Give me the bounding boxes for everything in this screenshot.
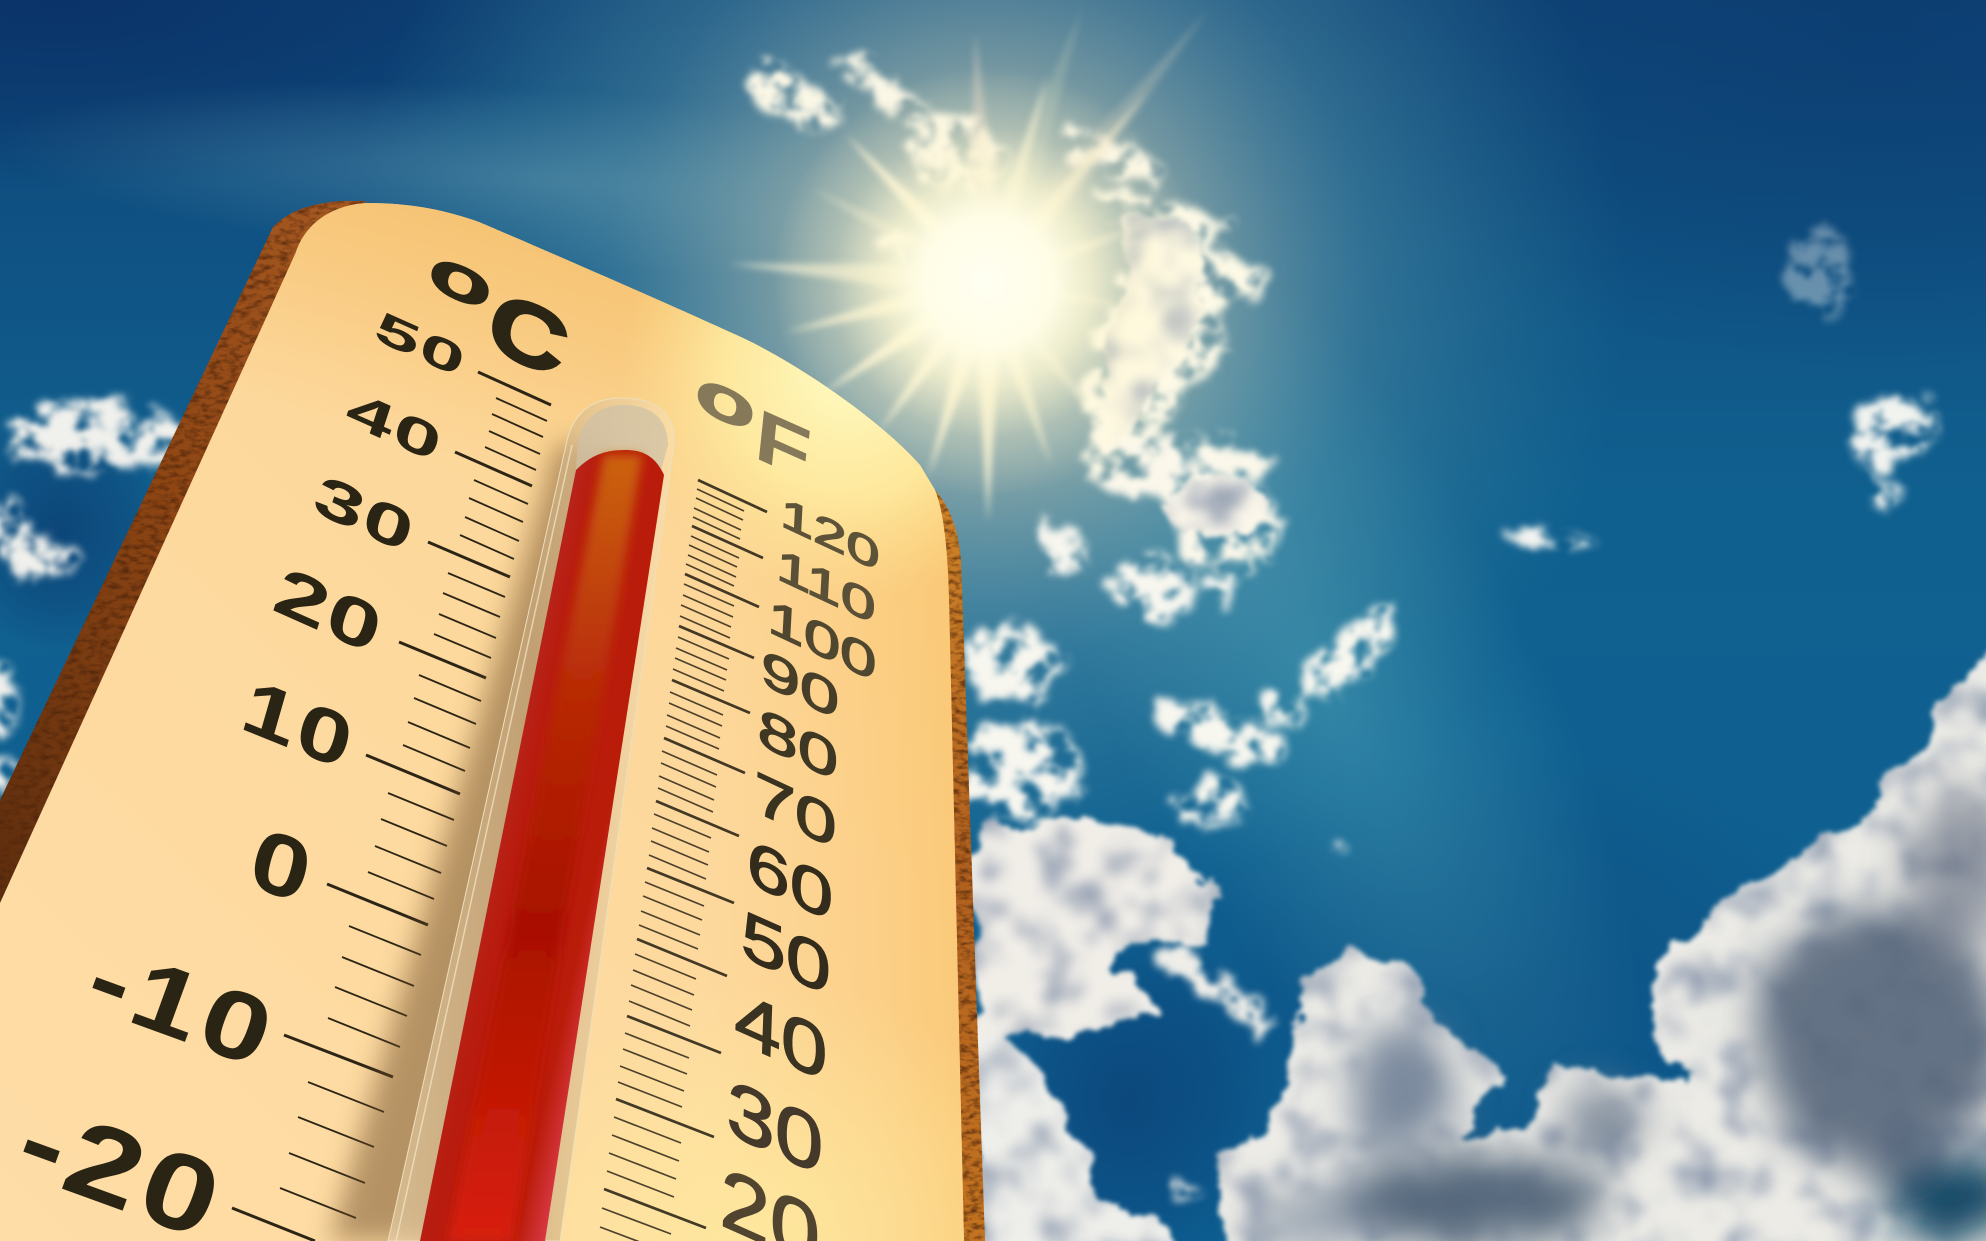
Celsius scale numbers: -10 [74,924,291,1089]
Fahrenheit unit label: o [690,354,762,446]
glass highlight [396,445,572,1241]
Fahrenheit scale numbers: 120 [779,488,881,580]
Fahrenheit scale numbers: 110 [775,539,877,634]
Fahrenheit unit label [690,354,815,497]
red liquid [420,450,664,1241]
cloud: scattered middle puffs [960,522,1411,858]
Fahrenheit scale numbers: 50 [740,895,832,1010]
cloud puffs at the left edge [0,397,192,795]
cloud: small right puffs [1510,224,1950,548]
red liquid core [448,455,642,1241]
Fahrenheit scale numbers: 100 [766,588,878,692]
tube shadow [330,445,610,1241]
Celsius scale numbers: 0 [240,809,321,922]
sun rays [727,0,1227,522]
thermometer wooden back, left [0,201,367,903]
thermometer wooden back, right [935,490,985,1241]
Fahrenheit scale numbers: 30 [725,1062,825,1193]
Celsius unit label: o [421,232,502,325]
Fahrenheit unit label: F [751,393,815,497]
Celsius scale numbers: 50 [369,302,473,387]
Fahrenheit scale numbers: 90 [760,638,840,730]
glass tube with red liquid [330,398,674,1241]
Celsius scale ticks [232,372,551,1241]
cloud: left edge [0,397,192,795]
cloud: wisps above the sun [738,45,1166,257]
Celsius unit label: C [478,272,579,397]
Fahrenheit scale numbers: 40 [733,974,829,1097]
Celsius scale numbers: 30 [306,463,423,566]
Fahrenheit scale numbers [718,488,881,1241]
cloud: column core [1105,220,1265,535]
cloud: large bottom right cumulus [1215,610,1986,1241]
Fahrenheit scale ticks [600,480,767,1241]
glass tube [388,398,674,1241]
sun disc [773,67,1203,497]
sun with rays [727,0,1227,522]
cloud: column beside the sun [1084,186,1293,574]
thermometer [0,201,985,1241]
Fahrenheit scale numbers: 60 [745,825,835,935]
Fahrenheit scale numbers: 80 [756,697,840,793]
glass cap highlight [576,405,668,470]
Celsius scale numbers: 40 [340,380,450,473]
Celsius scale numbers: 20 [266,552,392,668]
cloud: shaded underside [1260,780,1986,1241]
Celsius scale numbers [3,302,473,1241]
Celsius scale numbers: 10 [233,662,364,786]
cloud: lower middle bank [973,812,1215,1241]
cloud: wisps of the lower bank [1146,929,1284,1202]
Fahrenheit scale numbers: 70 [752,758,838,861]
thermometer face [0,203,964,1241]
Celsius unit label [421,232,579,397]
